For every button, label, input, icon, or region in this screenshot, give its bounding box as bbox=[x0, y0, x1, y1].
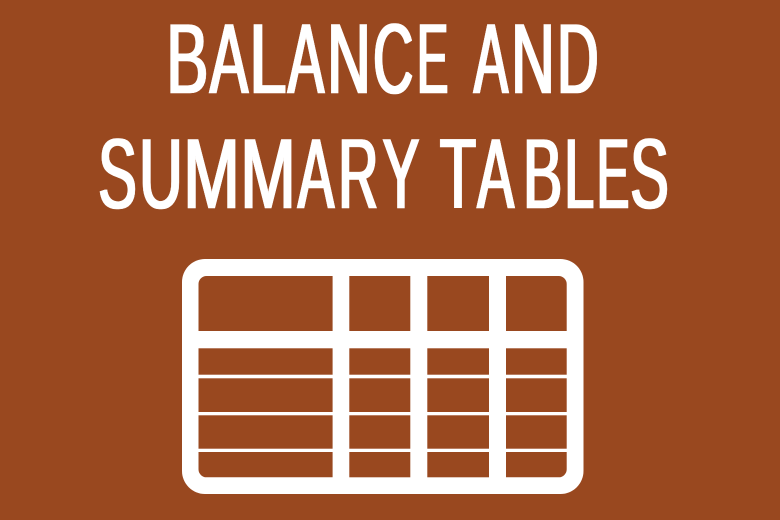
title: M bbox=[240, 117, 296, 229]
title: S bbox=[630, 119, 669, 230]
title: B bbox=[166, 3, 208, 115]
title: A bbox=[210, 4, 249, 115]
title: A bbox=[288, 4, 325, 115]
title: A bbox=[477, 119, 514, 230]
title: L bbox=[564, 118, 594, 229]
title: M bbox=[183, 119, 240, 230]
title: L bbox=[249, 3, 287, 114]
title: R bbox=[338, 119, 378, 230]
title: B bbox=[523, 119, 562, 230]
title: A bbox=[474, 3, 508, 114]
title bbox=[98, 3, 669, 231]
title: C bbox=[373, 4, 413, 115]
title: E bbox=[597, 118, 629, 230]
icon: table bbox=[182, 259, 584, 494]
title: Y bbox=[382, 119, 419, 230]
title: A bbox=[298, 119, 335, 231]
title: E bbox=[417, 5, 448, 115]
title: N bbox=[327, 3, 371, 115]
title: T bbox=[440, 120, 476, 230]
title: D bbox=[557, 4, 599, 115]
title: U bbox=[139, 120, 183, 230]
title: N bbox=[511, 3, 555, 115]
title: S bbox=[98, 119, 137, 230]
